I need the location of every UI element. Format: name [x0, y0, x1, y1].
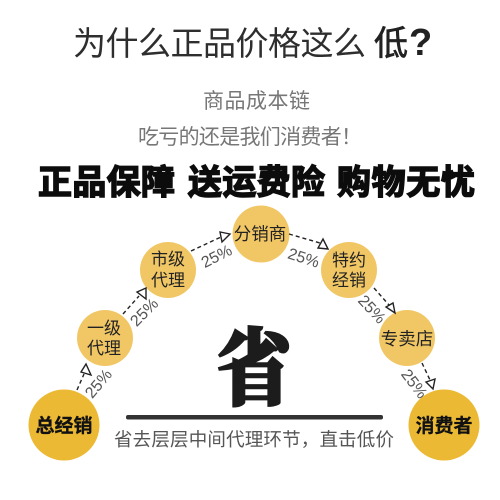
node: 分销商: 分销商	[234, 224, 286, 244]
node: 专卖店	[379, 310, 435, 366]
arrow: 市级代理 to 分销商	[191, 232, 230, 251]
arrow: 专卖店 to 消费者	[422, 363, 435, 389]
slogan banner	[38, 164, 475, 202]
node: 分销商	[232, 206, 290, 262]
node: 一级代理: 一级	[87, 319, 121, 338]
label: 25% three: 25%	[199, 242, 235, 272]
subtitle: line two: 吃亏的还是我们消费者！	[138, 126, 362, 149]
node: 市级代理: 市级	[151, 250, 185, 269]
title: 为什么正品价格这么	[73, 25, 366, 62]
bottom caption: 省去层层中间代理环节，直击低价	[114, 429, 394, 450]
label: 25% five: 25%	[354, 292, 388, 327]
title: ?	[409, 22, 432, 64]
slogan banner: 购物无忧	[337, 164, 475, 202]
subtitle: line one: 商品成本链	[203, 90, 310, 113]
node: 总经销	[28, 390, 100, 460]
slogan banner: 正品保障	[38, 164, 175, 202]
title: 低	[374, 25, 408, 63]
arrow: 特约经销 to 专卖店	[374, 288, 395, 313]
divider line	[126, 415, 383, 420]
node: 消费者: 消费者	[415, 415, 473, 437]
label: 25% one: 25%	[82, 366, 116, 402]
node: 特约经销: 特约	[332, 251, 366, 270]
node: 一级代理	[77, 310, 133, 366]
node: 特约经销	[321, 242, 377, 298]
label: 25% six: 25%	[397, 366, 430, 402]
node: 总经销: 总经销	[35, 415, 93, 437]
arrow: 分销商 to 特约经销	[289, 234, 328, 249]
node: 专卖店: 专卖店	[381, 329, 433, 349]
node: 市级代理	[140, 242, 196, 298]
label: 25% two: 25%	[127, 295, 162, 330]
node: 消费者	[408, 390, 480, 460]
arrow: 一级代理 to 市级代理	[123, 288, 146, 314]
slogan banner: 送运费险	[188, 164, 325, 202]
big brush character: 省	[217, 302, 296, 422]
label: 25% four: 25%	[286, 246, 321, 272]
node: 特约经销: 经销	[332, 271, 366, 290]
node: 市级代理: 代理	[151, 271, 185, 290]
node: 一级代理: 代理	[87, 339, 121, 358]
arrow: 总经销 to 一级代理	[77, 364, 91, 390]
